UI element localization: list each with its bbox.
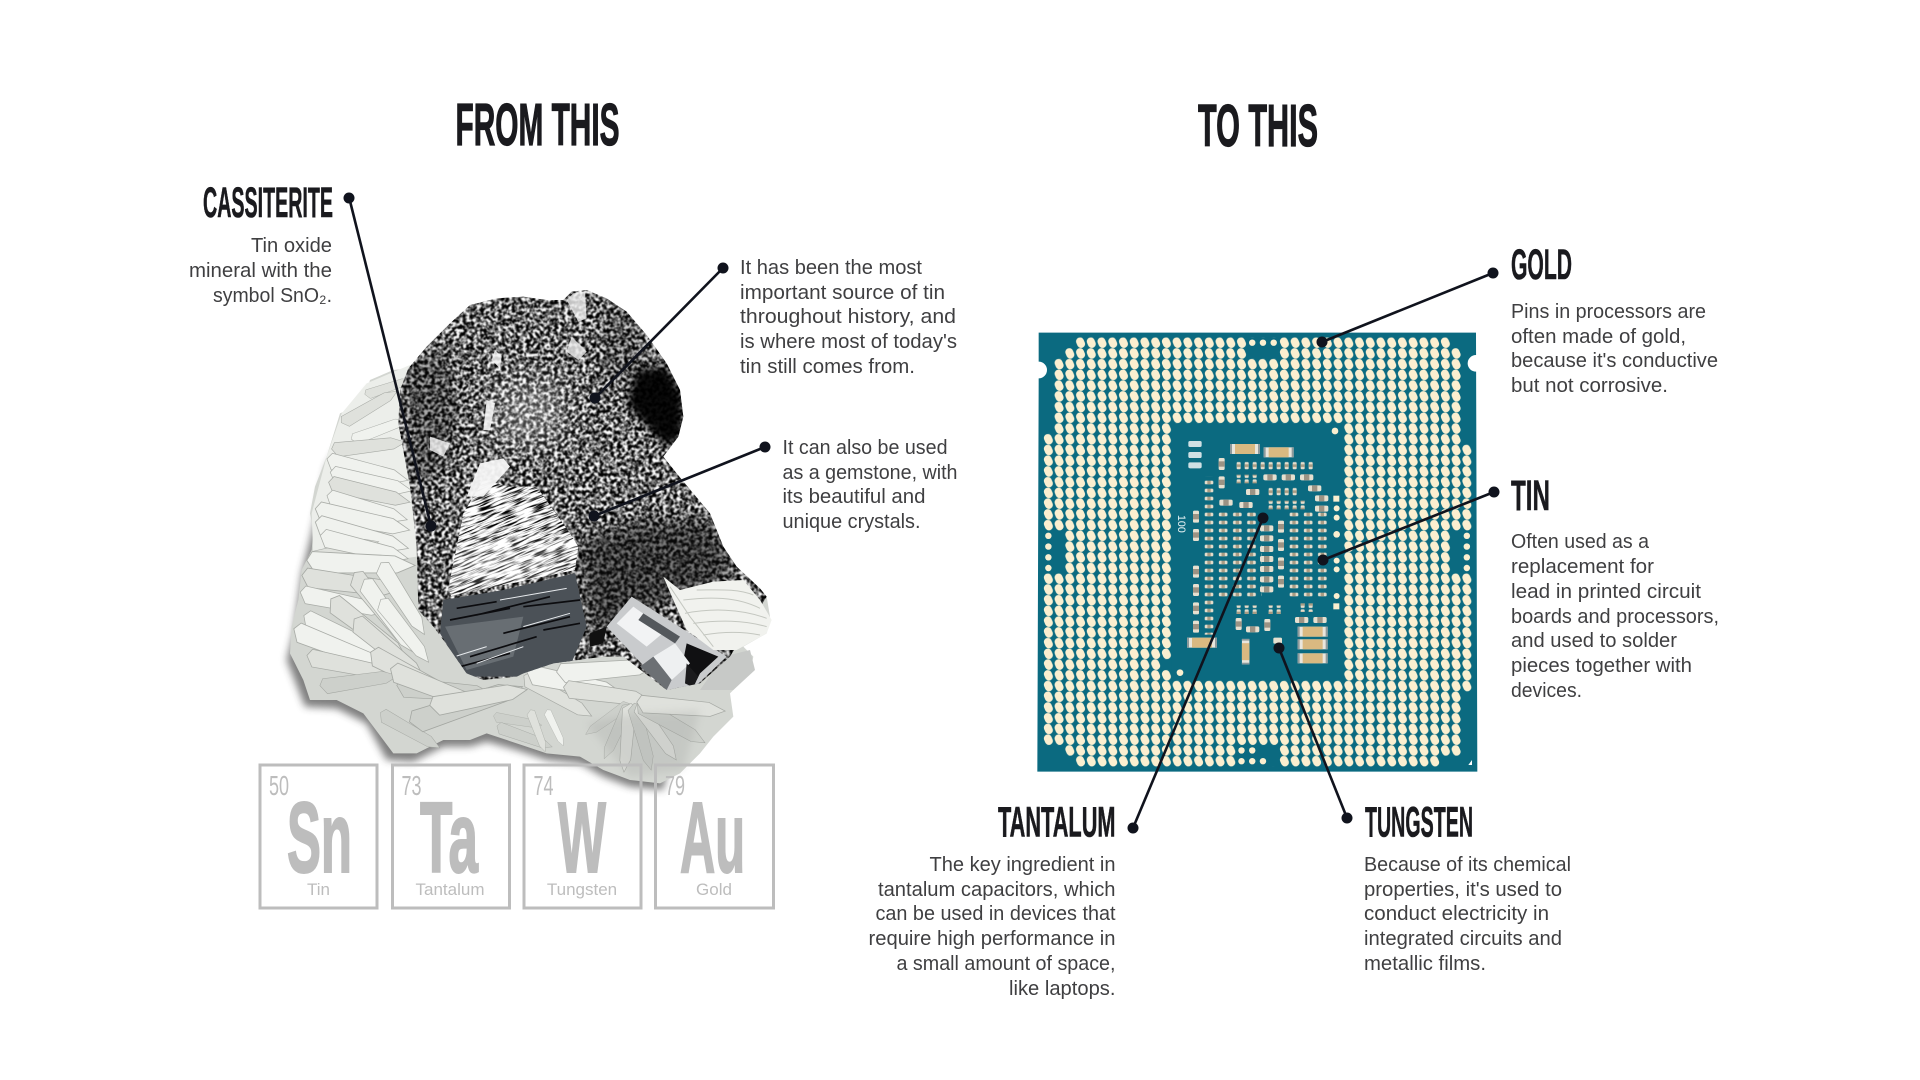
callout: gold: because it's conductive (1511, 350, 1718, 372)
callout: tin: pieces together with (1511, 655, 1692, 677)
callout: gold: often made of gold, (1511, 326, 1686, 348)
callout: gold: Pins in processors are (1511, 301, 1706, 323)
callout: tantalum: can be used in devices that (876, 903, 1116, 925)
title: from this: FROM THIS (456, 92, 620, 158)
callout: tungsten: metallic films. (1364, 953, 1486, 975)
periodic table cards (260, 765, 774, 908)
image: cassiterite mineral (287, 287, 773, 790)
title: to this: TO THIS (1198, 93, 1318, 159)
callout: source of tin: It has been the most (740, 257, 922, 279)
callout: tin (1318, 472, 1719, 702)
callout: gemstone: It can also be used (782, 437, 948, 459)
card: tin: 50 (269, 770, 289, 801)
callout: tantalum: tantalum capacitors, which (878, 879, 1116, 901)
dark silver mineral body (393, 287, 773, 697)
card: tantalum (392, 765, 510, 908)
callout: gemstone: as a gemstone, with (782, 462, 958, 484)
callout: source of tin: important source of tin (740, 282, 945, 304)
white crystal cluster (290, 365, 770, 783)
callout: tin: boards and processors, (1511, 606, 1719, 628)
callout: cassiterite: Tin oxide (251, 235, 332, 257)
callout: tin: and used to solder (1511, 630, 1677, 652)
card: gold: 79 (665, 770, 685, 801)
callout: tantalum: a small amount of space, (896, 953, 1116, 975)
callout: tin: lead in printed circuit (1511, 581, 1701, 603)
card: tin: Tin (307, 880, 330, 899)
card: tungsten (524, 765, 641, 908)
callout: cassiterite: mineral with the (189, 260, 332, 282)
card: tantalum: Ta (420, 782, 479, 894)
callout: gold: but not corrosive. (1511, 375, 1668, 397)
chip: processor underside (1030, 333, 1484, 772)
callout: tungsten: Because of its chemical (1364, 854, 1571, 876)
callout: cassiterite: CASSITERITE (203, 179, 333, 227)
callout: tantalum: TANTALUM (998, 798, 1116, 846)
card: tin (260, 765, 377, 908)
callout: cassiterite (189, 179, 436, 532)
callout: tin: TIN (1511, 472, 1550, 520)
callout: tantalum (868, 512, 1268, 1000)
surface-mount components (1177, 428, 1340, 676)
card: tungsten: 74 (534, 770, 554, 801)
callout: gemstone (588, 437, 958, 533)
cavity round contacts (1177, 428, 1340, 676)
card: tin: Sn (287, 782, 352, 894)
card: tungsten: Tungsten (547, 880, 617, 899)
callout: source of tin: tin still comes from. (740, 356, 915, 378)
callout: tungsten: integrated circuits and (1364, 928, 1562, 950)
contact pad grid (1043, 337, 1472, 767)
card: tantalum: 73 (402, 770, 422, 801)
callout: tin: Often used as a (1511, 531, 1650, 553)
callout: tungsten: properties, it's used to (1364, 879, 1562, 901)
callout: tungsten: TUNGSTEN (1365, 798, 1473, 846)
callout: tungsten (1274, 642, 1571, 975)
mineral drop shadow (287, 380, 687, 790)
card: tantalum: Tantalum (416, 880, 484, 899)
callout: source of tin: throughout history, and (740, 306, 956, 328)
callout: tantalum: The key ingredient in (930, 854, 1116, 876)
smooth blue-grey facet (440, 573, 587, 677)
callout: tin: replacement for (1511, 556, 1654, 578)
callout: tantalum: like laptops. (1009, 978, 1116, 1000)
right white crystal cluster (663, 577, 772, 650)
callout: gold (1316, 241, 1718, 397)
card: gold: Au (680, 782, 745, 894)
callout: gemstone: unique crystals. (782, 511, 920, 533)
callout: source of tin: is where most of today's (740, 331, 957, 353)
callout: tungsten: conduct electricity in (1364, 903, 1549, 925)
chip notches (1030, 355, 1484, 765)
callout: source of tin (590, 257, 957, 404)
chip marking: 100 (1175, 515, 1187, 533)
card: tungsten: W (558, 782, 606, 894)
silver metal crystal (607, 597, 727, 690)
card: gold (656, 765, 774, 908)
chip substrate (1037, 333, 1477, 772)
callout: gemstone: its beautiful and (782, 486, 926, 508)
card: gold: Gold (696, 880, 732, 899)
dark shading patches (627, 367, 683, 447)
callout: gold: GOLD (1511, 241, 1572, 289)
callout: tin: devices. (1511, 680, 1582, 702)
callout: tantalum: require high performance in (868, 928, 1116, 950)
callout: cassiterite: symbol SnO₂. (213, 285, 332, 307)
